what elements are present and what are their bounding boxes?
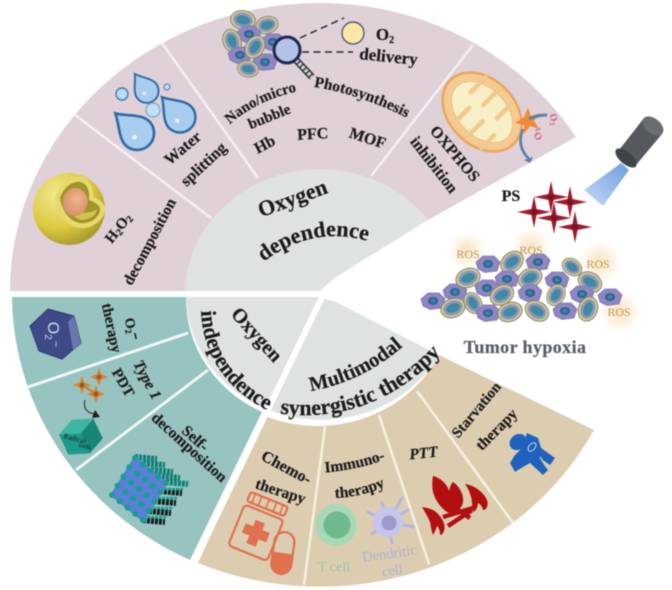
grey hub upper xyxy=(185,169,428,291)
label: O2 therapy: ⁻ xyxy=(124,332,140,342)
icon: cell cluster with magnifier xyxy=(219,8,312,79)
sub-labels: oxygen delivery methods: PFC xyxy=(297,125,329,144)
icon: radical ions cube: ions xyxy=(78,440,92,452)
icon: superoxide hexagon xyxy=(30,309,81,359)
icon: superoxide hexagon: ⁻ xyxy=(44,340,61,348)
dashed zoom lines xyxy=(300,18,353,52)
label: OXPHOS inhibition xyxy=(406,123,483,197)
label: chemotherapy: therapy xyxy=(253,476,308,508)
label: H2O2 decomposition: 2 xyxy=(114,227,126,238)
label: chemotherapy: Chemo- xyxy=(258,448,314,488)
hub heading: oxygen dependence xyxy=(254,174,370,261)
label: H2O2 decomposition: H xyxy=(102,228,122,247)
sub-labels: oxygen delivery methods xyxy=(223,76,410,158)
label: dendritic cell: Dendritic xyxy=(361,542,418,566)
label: Type 1 PDT xyxy=(108,357,164,402)
panel: oxygen dependence xyxy=(10,2,576,292)
label: H2O2 decomposition: O xyxy=(113,214,132,233)
label: dendritic cell: cell xyxy=(381,562,404,580)
label: O2 delivery: O xyxy=(376,25,389,44)
label: immunotherapy: Immuno- xyxy=(324,454,384,474)
icon: T cell xyxy=(315,504,357,546)
label: O2 therapy: 2 xyxy=(123,328,134,335)
grey hub lower xyxy=(186,297,439,420)
label: self-decomposition: Self- xyxy=(178,422,212,455)
icon: radical ions cube xyxy=(56,411,106,462)
label: Type 1 PDT: PDT xyxy=(108,366,137,400)
hub headings: lower: Oxygen xyxy=(226,303,287,367)
sub-labels: oxygen delivery methods: MOF xyxy=(347,125,388,153)
ROS labels xyxy=(456,243,631,319)
sub-labels: oxygen delivery methods: Photosynthesis xyxy=(314,76,410,118)
sub-labels: oxygen delivery methods: bubble xyxy=(246,101,293,133)
icon: photosensitizer stars xyxy=(517,181,592,243)
label: PTT: PTT xyxy=(409,444,439,463)
label: O2 therapy xyxy=(98,302,140,355)
hub headings: lower xyxy=(200,303,440,420)
icon: superoxide hexagon: 2 xyxy=(42,334,53,340)
pink sector xyxy=(10,3,576,291)
label: O2 delivery: 2 xyxy=(389,35,394,46)
tan sector xyxy=(198,355,594,587)
label: superoxide and oxygen markers: O xyxy=(547,112,559,123)
label: tumor hypoxia: Tumor hypoxia xyxy=(464,337,586,357)
label: T cell: T cell xyxy=(318,560,350,575)
icon: starving figure xyxy=(506,430,555,475)
label: O2 delivery xyxy=(358,25,419,69)
icon: radicals reacting xyxy=(73,368,108,418)
icon: medicine bottle and pill xyxy=(228,492,296,575)
hub headings: lower: Multimodal xyxy=(308,336,404,392)
label: immunotherapy xyxy=(324,454,384,499)
label: self-decomposition: decomposition xyxy=(148,409,230,486)
label: PS: PS xyxy=(502,188,520,205)
sub-labels: oxygen delivery methods: Nano/micro xyxy=(223,84,296,125)
teal sector xyxy=(12,297,262,560)
label: superoxide and oxygen markers xyxy=(530,112,560,142)
label: superoxide and oxygen markers: O xyxy=(532,130,545,142)
label: OXPHOS inhibition: OXPHOS xyxy=(426,123,483,186)
icon: radical ions cube: Radical xyxy=(62,431,87,446)
icon: superoxide hexagon: O xyxy=(44,322,61,334)
ROS labels: ROS xyxy=(607,305,631,319)
label: water splitting: splitting xyxy=(178,139,230,190)
panel: multimodal synergistic therapy xyxy=(198,296,594,588)
icon: dendritic cell xyxy=(368,498,414,543)
label: starvation therapy xyxy=(449,379,521,454)
icon: water drops xyxy=(104,67,202,157)
sub-labels: oxygen delivery methods: Hb xyxy=(251,132,278,158)
icon: yolk-shell sphere xyxy=(33,173,105,245)
ROS glows xyxy=(447,227,642,334)
label: immunotherapy: therapy xyxy=(334,480,384,499)
label: O2 therapy: therapy xyxy=(98,302,124,355)
label: water splitting xyxy=(161,128,230,190)
icon: porous framework cube xyxy=(109,455,188,523)
panel: oxygen independence xyxy=(12,297,439,560)
label: H2O2 decomposition: decomposition xyxy=(120,195,180,288)
ROS labels: ROS xyxy=(456,247,480,261)
label: starvation therapy: Starvation xyxy=(449,379,505,441)
label: O2 therapy: O xyxy=(121,317,138,330)
tumor cell cluster xyxy=(421,247,622,325)
label: starvation therapy: therapy xyxy=(473,405,521,454)
hub headings: lower: synergistic therapy xyxy=(280,346,440,420)
label: superoxide and oxygen markers: 2 xyxy=(533,126,542,133)
icon: oxygen bubble xyxy=(342,22,364,44)
label: water splitting: Water xyxy=(161,128,205,169)
ROS labels: ROS xyxy=(586,257,610,271)
label: OXPHOS inhibition: inhibition xyxy=(406,134,461,197)
icon: flashlight and beam xyxy=(584,113,667,206)
label: Type 1 PDT: Type 1 xyxy=(130,357,164,402)
white divider xyxy=(193,297,322,565)
hub headings: lower: independence xyxy=(200,310,272,410)
label: superoxide and oxygen markers: 2 xyxy=(548,121,556,127)
hub heading: oxygen dependence: Oxygen xyxy=(254,174,331,222)
label: chemotherapy xyxy=(253,448,314,508)
label: dendritic cell xyxy=(361,542,418,580)
icon: flames xyxy=(422,476,488,535)
label: H2O2 decomposition: 2 xyxy=(124,214,136,225)
label: O2 delivery: delivery xyxy=(358,44,419,69)
icon: mitochondrion xyxy=(427,57,547,167)
ROS labels: ROS xyxy=(519,243,543,257)
hub heading: oxygen dependence: dependence xyxy=(259,220,370,261)
